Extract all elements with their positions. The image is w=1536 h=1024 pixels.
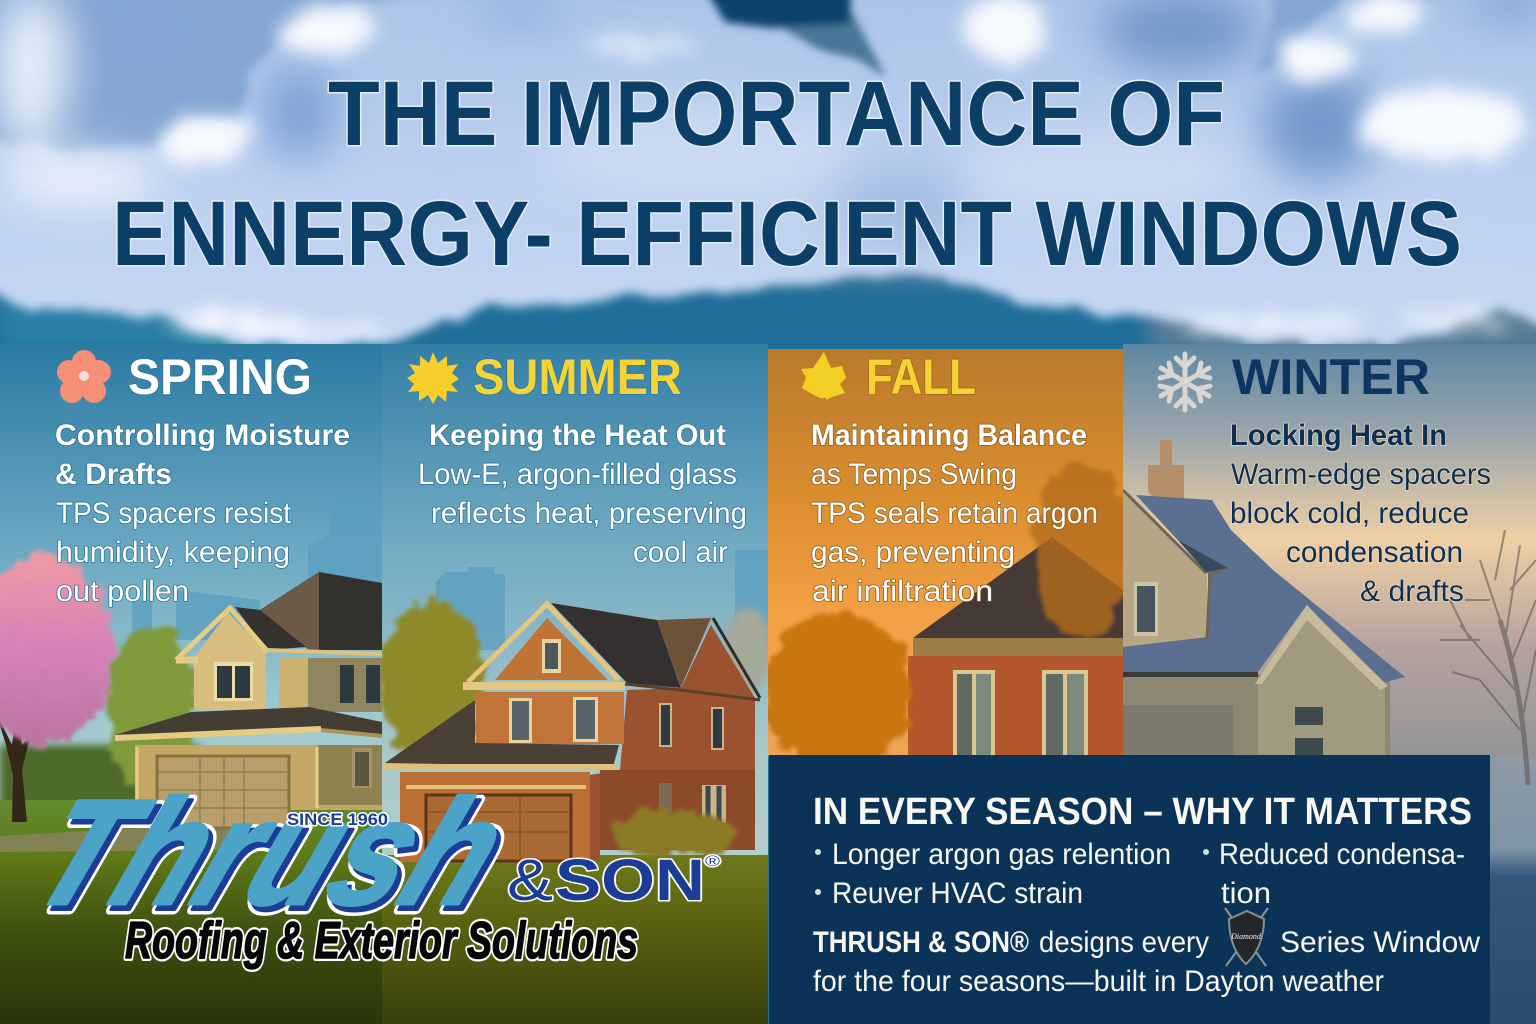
spring ground [0,800,382,1024]
right bullet: tion [1221,877,1271,910]
icon: maple leaf [801,352,846,400]
snowy ground [1490,755,1536,1024]
spring skyline [132,529,382,640]
summer column text [407,349,747,569]
winter body: & drafts [1360,575,1464,608]
spring body: TPS spacers resist [56,497,292,530]
icon: diamond series shield [1225,908,1268,966]
winter body [1230,419,1491,608]
summer ground [382,855,768,1024]
sky background with clouds [0,0,1536,350]
left bullets: Reuver HVAC strain [832,877,1083,910]
winter body: Warm-edge spacers [1231,458,1491,491]
fall body [811,419,1098,608]
closing statement: designs every [1039,926,1209,959]
fall body: Maintaining Balance [811,419,1087,452]
green tree [104,628,196,792]
spring body: & Drafts [55,458,172,491]
brick wall [908,656,1123,756]
spring column text [55,349,350,608]
dark roof [551,603,681,688]
panel: fall [762,349,1130,768]
panel: spring [0,344,382,1024]
winter column text [1160,349,1491,608]
heading: fall: FALL [866,349,976,405]
lower roof [385,700,619,767]
logo: and son [507,848,720,913]
fall column text [801,349,1098,608]
lower roof [115,707,382,735]
spring body: Controlling Moisture [55,419,350,452]
spring body: out pollen [56,575,189,608]
right bullet: Reduced condensa- [1219,838,1465,871]
winter body: Locking Heat In [1230,419,1447,452]
dark storm wedge [706,0,886,78]
main roof [260,572,382,650]
heading: summer: SUMMER [473,349,682,405]
right bullet [1203,838,1465,910]
summer body: cool air [633,536,728,569]
heading: in every season: IN EVERY SEASON – WHY IT MATTERS [813,791,1472,833]
chimney [1148,440,1184,498]
closing statement: for the four seasons—built in Dayton weather [813,965,1384,998]
logo: and son: ® [705,853,720,870]
winter house [1123,490,1405,756]
upper autumn tree [1034,462,1130,638]
panel: summer [380,344,772,1024]
spring body: humidity, keeping [56,536,290,569]
fall body: as Temps Swing [811,458,1017,491]
summer skyline [436,550,768,650]
autumn-green tree [380,600,484,760]
pink blossom tree [0,556,114,822]
panel: winter [1123,344,1536,1024]
fall body: TPS seals retain argon [811,497,1098,530]
closing statement [813,926,1480,998]
summer body [418,419,747,569]
fall body: air infiltration [812,575,993,608]
summer body: reflects heat, preserving [431,497,747,530]
logo tagline: Roofing & Exterior Solutions [125,912,638,970]
heading: winter: WINTER [1232,349,1430,405]
winter body: block cold, reduce [1230,497,1469,530]
icon: snowflake [1160,354,1210,410]
title: THE IMPORTANCE OF [328,63,1225,165]
driveway [0,828,230,852]
lower autumn tree [762,612,914,768]
bare tree [724,608,772,692]
logo: and son: & [507,848,553,913]
brick house [384,603,760,862]
heading: spring: SPRING [128,349,312,405]
logo script: Thrush: Thrush [15,774,532,942]
logo: Thrush & Son [11,769,720,970]
since 1960: SINCE 1960 [287,810,388,829]
icon: flower [57,350,111,403]
bare tree [1440,530,1536,785]
winter body: condensation [1286,536,1463,569]
logo: and son: SON [555,848,705,913]
logo tagline: Roofing & Exterior Solutions [125,912,638,970]
back tree line [0,745,200,815]
icon: sun [407,352,459,404]
summer body: Keeping the Heat Out [429,419,726,452]
closing statement: THRUSH & SON® [813,926,1029,959]
yellow house [115,572,382,828]
title [112,63,1462,285]
left bullets: Longer argon gas relention [832,838,1171,871]
fall windows [953,670,1088,756]
panel: why it matters [769,755,1490,1024]
logo script: Thrush: Thrush [11,769,528,937]
fall body: gas, preventing [811,536,1015,569]
closing statement: Series Window [1280,926,1480,959]
icon: diamond series shield: Diamond [1230,932,1262,941]
summer body: Low-E, argon-filled glass [418,458,737,491]
spring body [55,419,350,608]
left bullets [815,838,1171,910]
logo script: Thrush: Thrush [15,774,532,942]
dark roof [913,537,1123,640]
